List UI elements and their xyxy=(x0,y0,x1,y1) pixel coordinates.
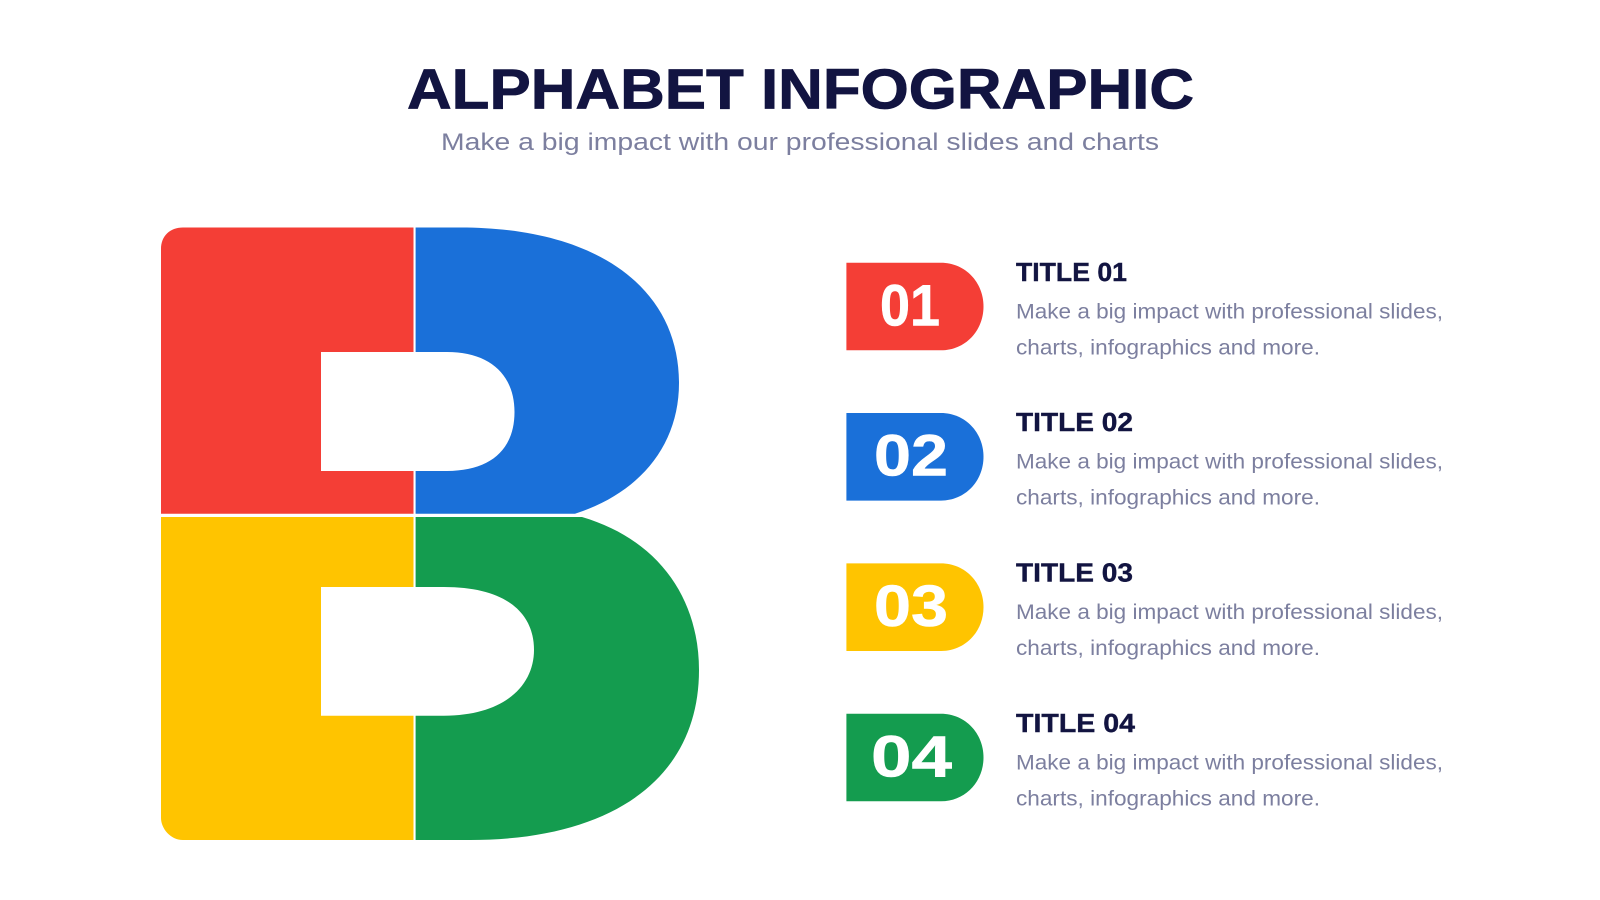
heading 04: TITLE 04 xyxy=(1016,708,1136,738)
letter segment: blue top right xyxy=(416,228,679,514)
description 02: charts, infographics and more. xyxy=(1016,486,1320,510)
description 04 xyxy=(1016,752,1443,810)
badge 03 xyxy=(846,563,984,651)
letter B graphic xyxy=(161,228,699,840)
letter segment: red top left xyxy=(161,228,414,514)
description 02: Make a big impact with professional slides, xyxy=(1016,450,1443,474)
badge 03: 03 xyxy=(874,574,948,639)
heading 02: TITLE 02 xyxy=(1016,407,1133,437)
item 01 xyxy=(846,257,1443,360)
description 01 xyxy=(1016,300,1443,360)
badge 04 xyxy=(846,714,984,801)
letter segment: green bottom right xyxy=(416,517,699,840)
badge 04: 04 xyxy=(871,724,952,790)
description 03 xyxy=(1016,601,1443,660)
description 03: Make a big impact with professional slides, xyxy=(1016,601,1443,624)
description 02 xyxy=(1016,450,1443,510)
letter segment: yellow bottom left xyxy=(161,517,414,840)
description 03: charts, infographics and more. xyxy=(1016,637,1320,660)
description 01: charts, infographics and more. xyxy=(1016,336,1320,360)
badge 01 xyxy=(846,263,984,350)
description 01: Make a big impact with professional slides, xyxy=(1016,300,1443,324)
heading 01: TITLE 01 xyxy=(1016,257,1127,287)
heading 03: TITLE 03 xyxy=(1016,558,1133,588)
item 02 xyxy=(846,407,1443,510)
badge 02: 02 xyxy=(874,424,948,488)
badge 01: 01 xyxy=(880,274,940,338)
description 04: charts, infographics and more. xyxy=(1016,788,1320,810)
description 04: Make a big impact with professional slides, xyxy=(1016,752,1443,774)
item 04 xyxy=(846,708,1443,810)
badge 02 xyxy=(846,413,984,501)
title: ALPHABET INFOGRAPHIC xyxy=(407,58,1194,122)
subtitle: Make a big impact with our professional slides and charts xyxy=(441,129,1159,156)
item 03 xyxy=(846,558,1443,660)
